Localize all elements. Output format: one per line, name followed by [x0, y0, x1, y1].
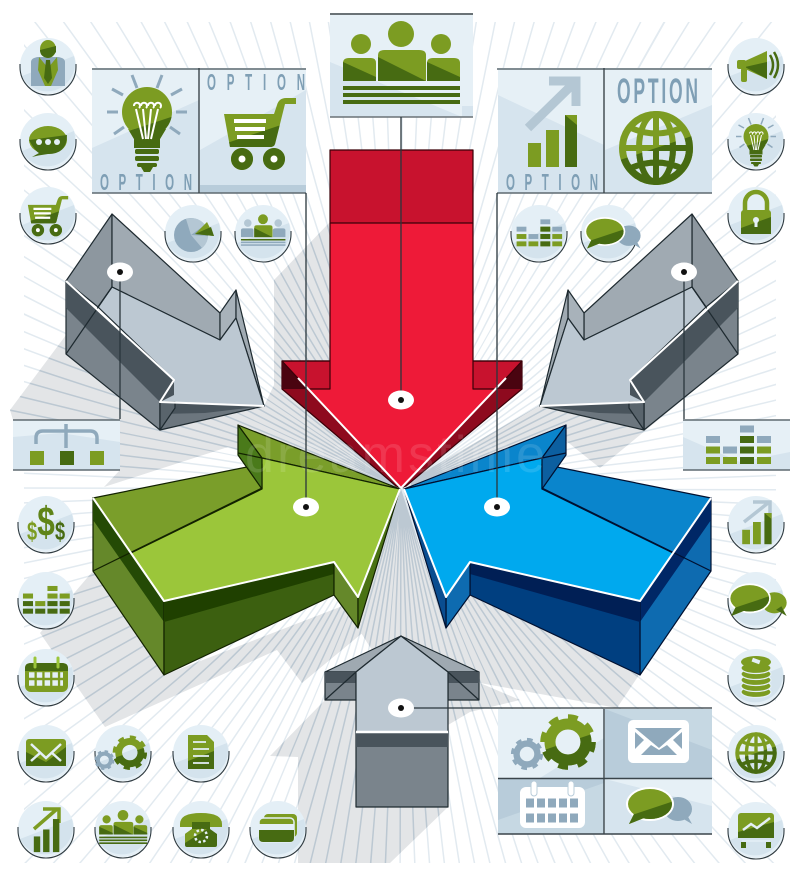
panel: idea and cart options — [92, 68, 306, 195]
icon: chat bubbles — [626, 787, 692, 824]
icon: presentation screen — [728, 802, 784, 859]
panel: team top centre — [330, 13, 473, 117]
panel: gears, mail, calendar, chat — [498, 709, 712, 834]
icon: equaliser small — [511, 205, 567, 262]
icon: cart small — [20, 187, 76, 244]
icon: telephone — [173, 801, 229, 858]
icon: speech bubble — [20, 113, 76, 170]
icon: padlock — [728, 187, 784, 244]
grey arrow bottom — [325, 636, 479, 807]
icon: equaliser green — [18, 572, 74, 629]
label: option bottom: OPTION — [100, 170, 192, 195]
icon: light bulb — [107, 75, 187, 172]
icon: bank cards — [250, 801, 306, 858]
icon: dollars: $ — [37, 498, 55, 545]
grey arrow left — [66, 214, 264, 430]
label: option top: OPTION — [617, 71, 698, 111]
icon: globe small — [728, 725, 784, 782]
icon: chat green — [728, 572, 787, 629]
marker dots — [107, 262, 697, 718]
icon: team small — [95, 801, 151, 858]
label: option top: OPTION — [207, 70, 305, 95]
arrow shadows — [10, 222, 697, 863]
icon: dollars: $ — [27, 517, 37, 546]
connector lines — [120, 117, 712, 708]
icon: businessman — [20, 38, 76, 95]
icon: envelope — [628, 720, 689, 763]
watermark: dreamstime — [245, 426, 545, 484]
icon: growth arrow — [528, 81, 576, 128]
icon: growth chart — [728, 496, 784, 553]
panel: equaliser — [683, 420, 790, 470]
icon: growth bars — [528, 115, 577, 167]
label: option bottom: OPTION — [506, 170, 598, 195]
panel: hierarchy — [13, 420, 120, 470]
red arrow — [282, 150, 522, 488]
icon: shopping cart — [224, 98, 296, 170]
icon: dollars — [18, 496, 74, 553]
icon: globe — [622, 112, 690, 184]
icon: growth chart green — [18, 801, 74, 858]
icon: calendar — [520, 781, 585, 828]
icon: calendar green — [18, 649, 74, 706]
icon: bulb small — [728, 113, 784, 170]
icon: pie chart — [165, 205, 221, 262]
icon: dollars: $ — [55, 517, 65, 546]
icon: chat muted — [581, 205, 641, 262]
grey arrow right — [540, 214, 738, 430]
icon: gears small — [95, 725, 151, 782]
icon: mail green — [18, 725, 74, 782]
panel: growth and globe options — [497, 68, 712, 195]
blue arrow — [404, 425, 711, 675]
icon: coins — [728, 649, 784, 706]
green arrow — [93, 425, 400, 675]
icon: team muted — [235, 205, 291, 262]
icon: document — [173, 725, 229, 782]
icon: gears — [512, 717, 593, 768]
icon: megaphone — [728, 38, 784, 95]
